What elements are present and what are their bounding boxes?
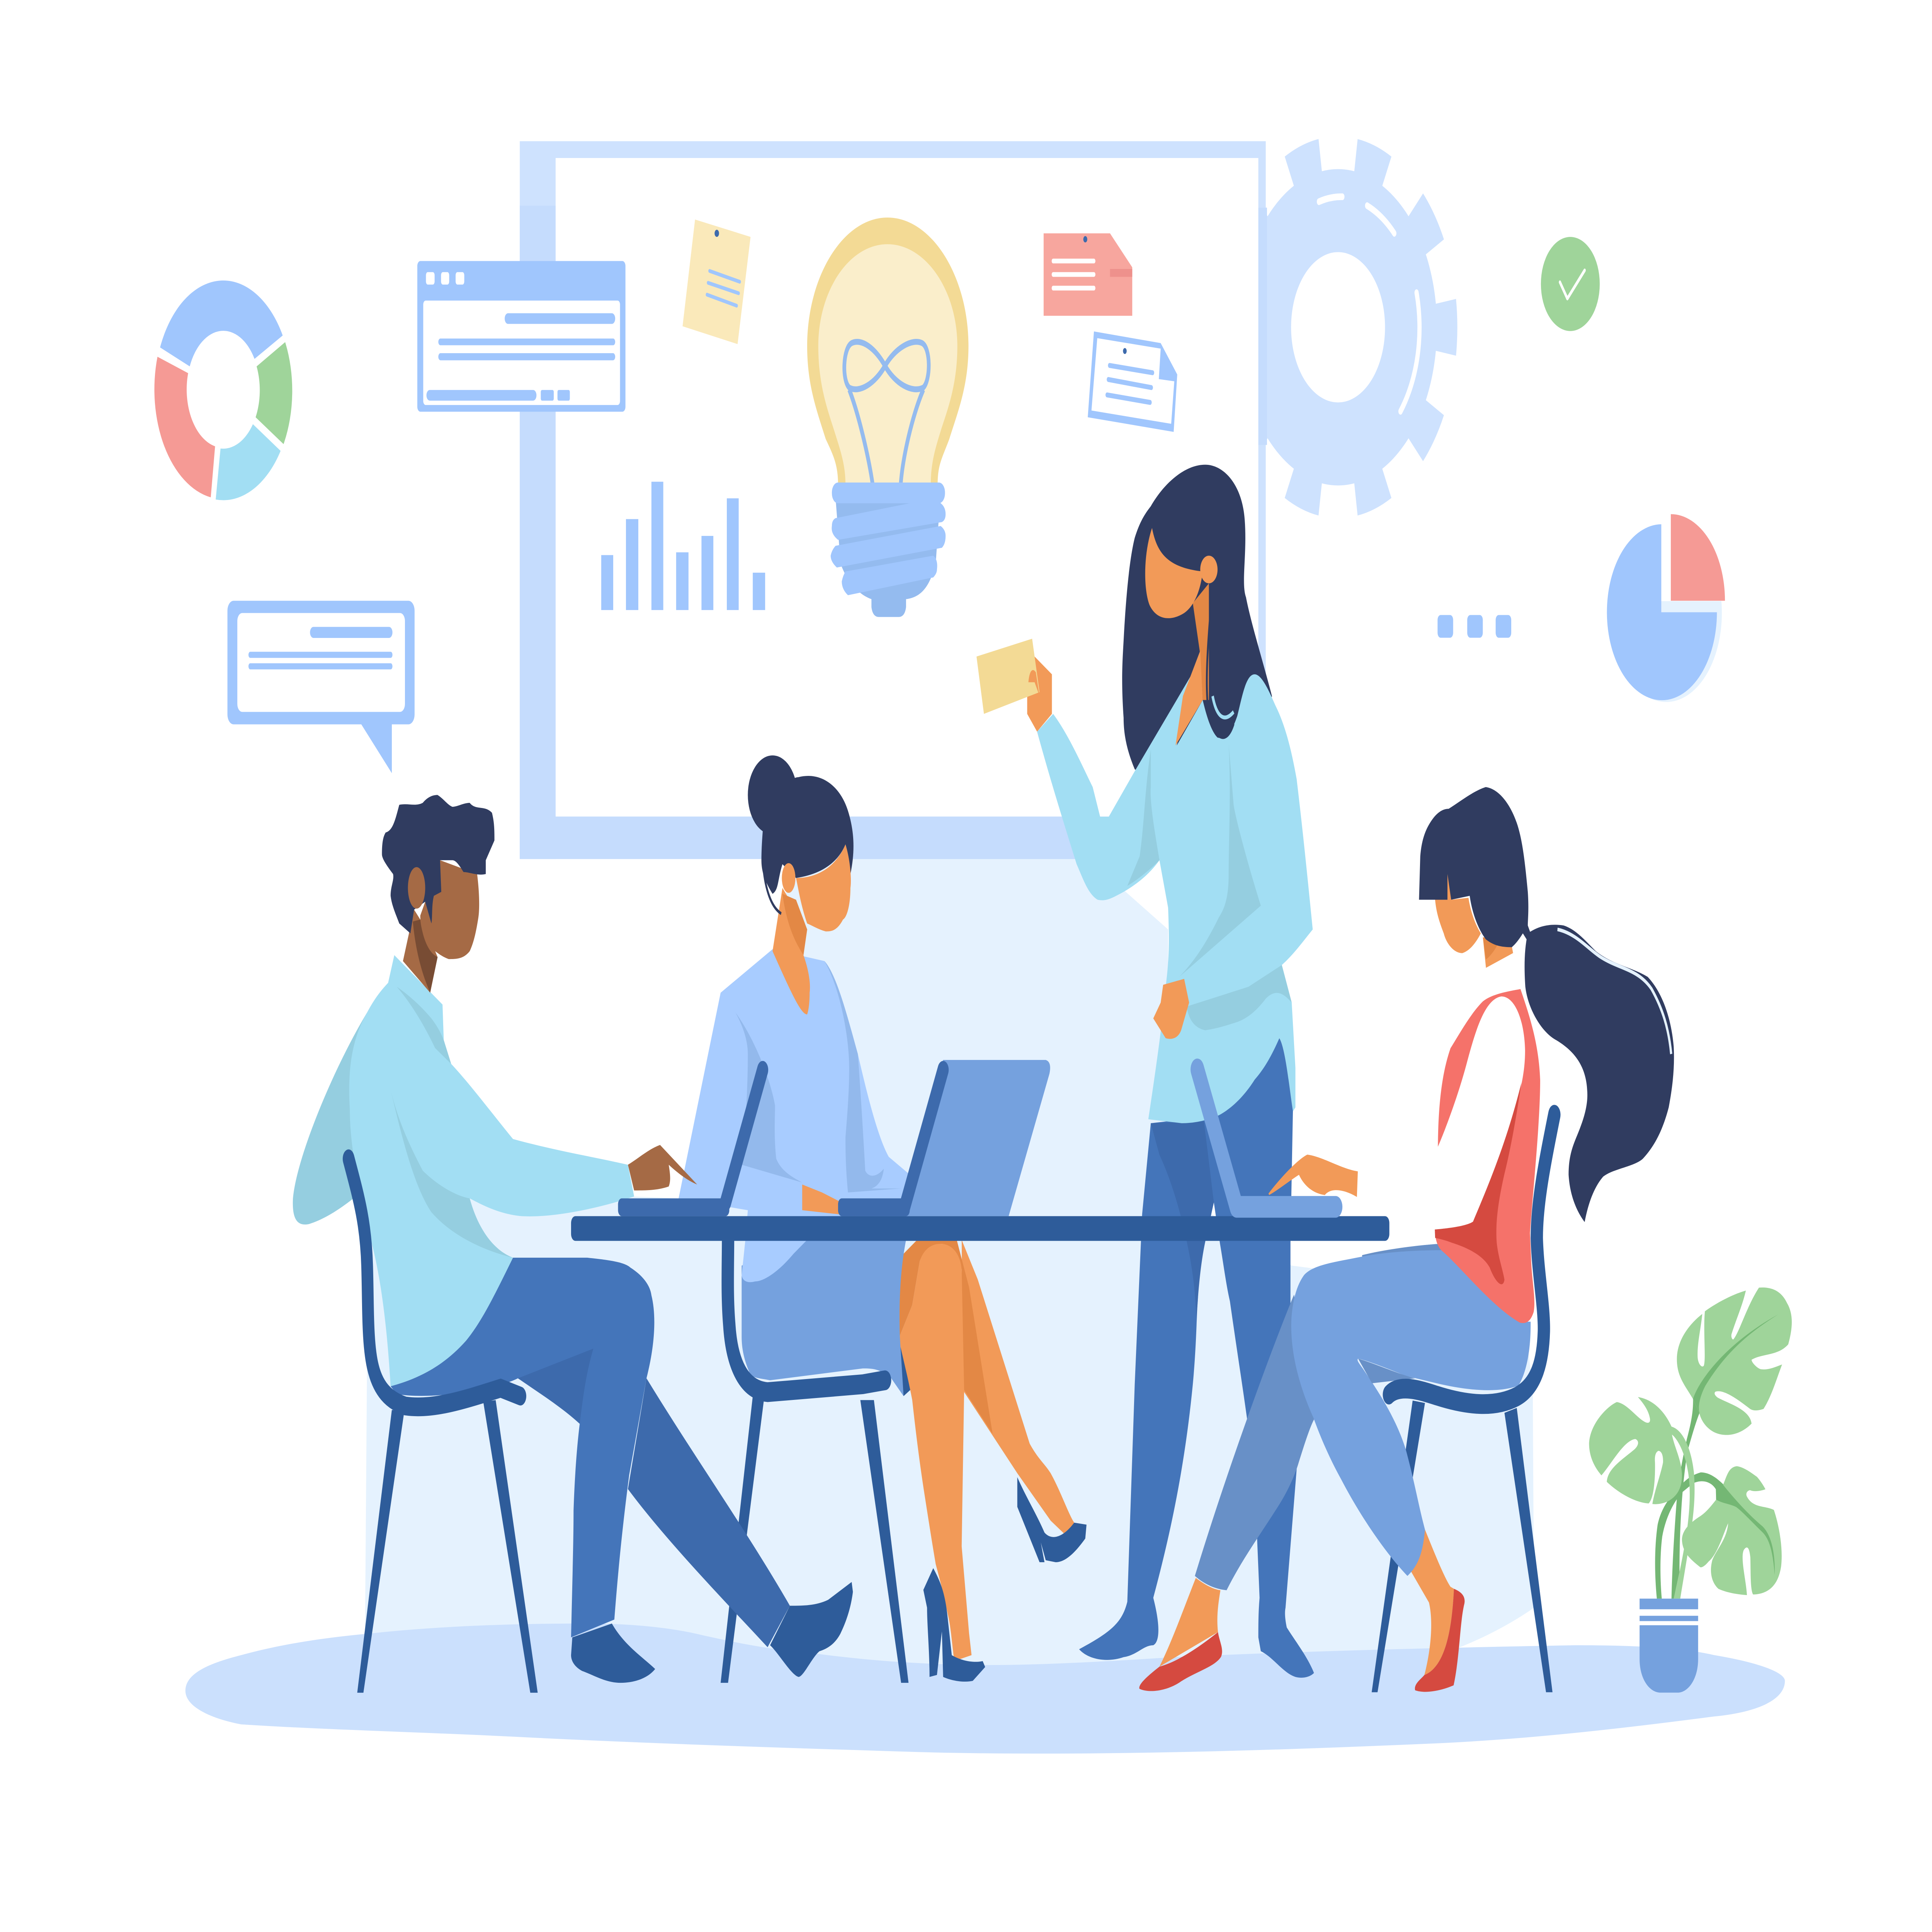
far ankle xyxy=(1160,1578,1220,1667)
chair four back and seat xyxy=(1389,1115,1554,1404)
chair four legs xyxy=(1372,1401,1553,1692)
neck and chest xyxy=(1193,583,1209,700)
neck xyxy=(403,910,437,993)
sleeve behind xyxy=(293,1012,367,1225)
laptop right xyxy=(1197,1070,1336,1207)
neck and chest xyxy=(772,888,810,1014)
ear xyxy=(1200,556,1218,583)
icon: sticky note yellow xyxy=(682,219,750,344)
icon: check badge xyxy=(1541,237,1600,331)
trousers xyxy=(1291,1244,1531,1576)
near shoe xyxy=(1415,1589,1464,1692)
near foot xyxy=(571,1624,655,1683)
icon: speech bubble xyxy=(228,601,415,773)
ear xyxy=(408,867,425,909)
hand at waist xyxy=(1153,979,1189,1039)
chair two back and seat xyxy=(728,1240,885,1392)
floor xyxy=(185,1624,1785,1753)
woman seated right xyxy=(1139,787,1674,1692)
trousers xyxy=(1079,1038,1314,1678)
chair one back and seat xyxy=(349,1159,520,1407)
icon: paper note blue xyxy=(1088,332,1177,432)
sweater xyxy=(1037,670,1313,1123)
icon: pie chart xyxy=(1607,510,1735,702)
icon: browser window xyxy=(417,261,626,412)
woman standing xyxy=(976,465,1314,1678)
far foot xyxy=(770,1582,853,1677)
face xyxy=(1145,528,1203,618)
leg behind xyxy=(962,1240,1074,1539)
neck xyxy=(1483,937,1513,968)
whiteboard surface xyxy=(556,158,1259,816)
top coral xyxy=(1435,989,1540,1323)
far leg xyxy=(628,1378,790,1647)
laptop centre xyxy=(838,1060,1050,1216)
whiteboard right edge xyxy=(1259,207,1267,445)
hair xyxy=(382,795,495,934)
far leg xyxy=(1195,1294,1315,1590)
near ankle xyxy=(1410,1530,1454,1675)
hand xyxy=(628,1145,697,1190)
table xyxy=(571,1216,1389,1241)
face xyxy=(1435,874,1481,953)
icon: sticky note pink xyxy=(1044,233,1132,316)
necklace strands xyxy=(1207,585,1234,738)
woman seated centre xyxy=(679,755,1087,1682)
laptop left xyxy=(618,1070,763,1216)
whiteboard frame xyxy=(520,141,1266,859)
skirt xyxy=(742,1240,906,1396)
ponytail xyxy=(1525,925,1674,1222)
room light background xyxy=(365,858,1534,1681)
hair xyxy=(762,776,854,894)
icon: three dots xyxy=(1437,615,1511,638)
hair strand xyxy=(763,850,781,913)
hand with card xyxy=(1027,656,1052,732)
face xyxy=(796,844,851,931)
ponytail highlight xyxy=(1558,929,1671,1054)
hair xyxy=(1419,787,1533,947)
face xyxy=(420,860,479,959)
blouse xyxy=(679,949,910,1282)
icon: donut chart xyxy=(155,281,292,500)
bar chart xyxy=(601,482,765,610)
man seated xyxy=(293,795,853,1683)
shoe xyxy=(923,1568,985,1682)
bun xyxy=(748,755,797,835)
icon: light bulb xyxy=(807,218,968,617)
front leg xyxy=(899,1244,971,1661)
shirt xyxy=(349,955,634,1386)
chair two legs xyxy=(721,1341,912,1683)
chair one legs xyxy=(357,1400,538,1693)
icon: potted plant xyxy=(1589,1287,1792,1693)
far shoe xyxy=(1139,1632,1222,1691)
trousers xyxy=(391,1258,654,1637)
icon: gear xyxy=(1231,155,1446,499)
hand right woman xyxy=(1269,1155,1358,1197)
hair xyxy=(1122,465,1272,791)
ear xyxy=(782,863,796,893)
hand centre woman xyxy=(802,1185,857,1216)
